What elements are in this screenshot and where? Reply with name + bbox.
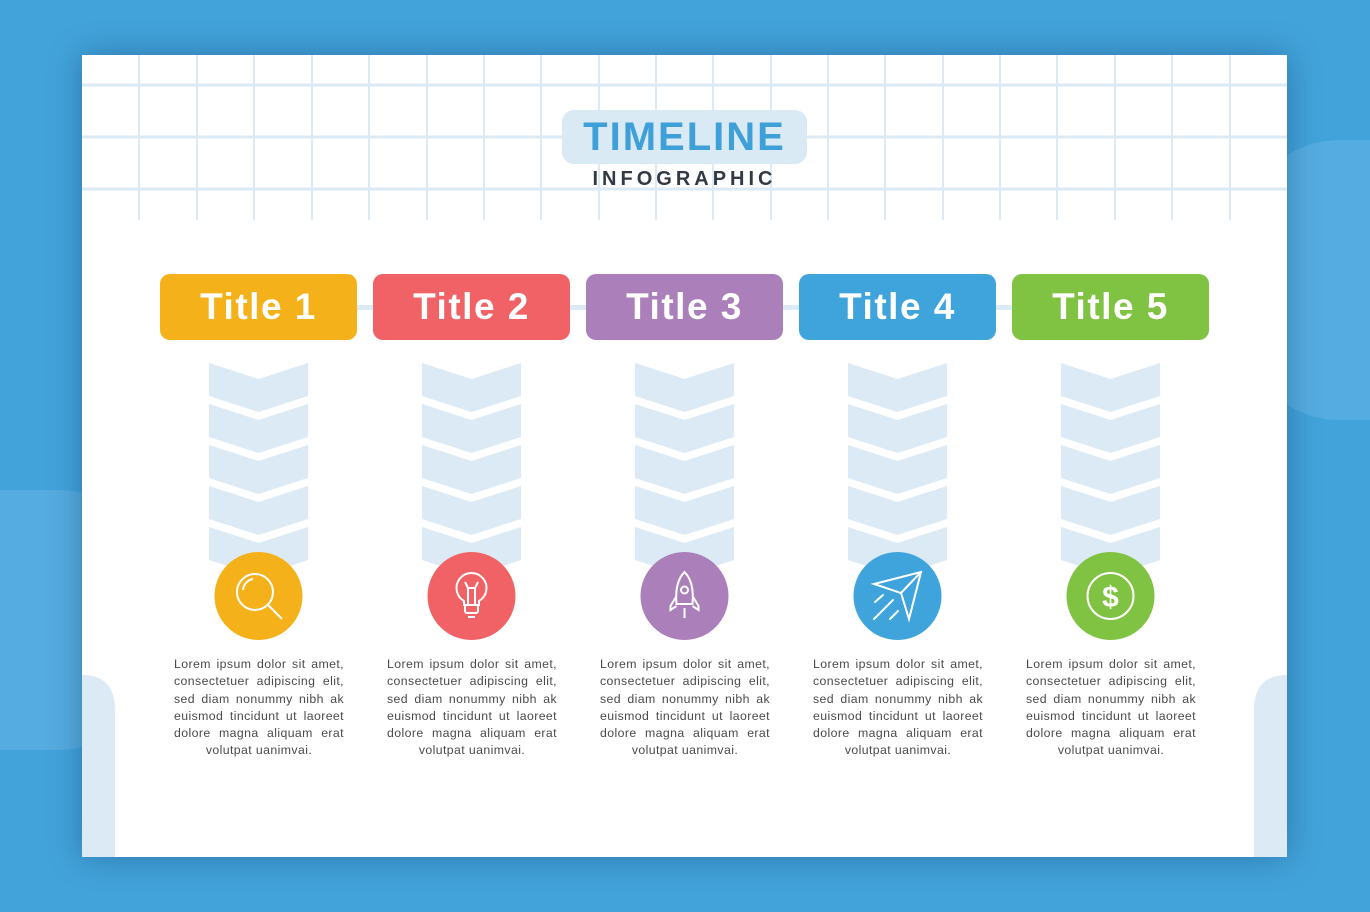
- icon: rocket: [640, 552, 728, 640]
- icon: dollar: [1066, 552, 1154, 640]
- card: [82, 55, 1287, 857]
- text: Lorem ipsum dolor sit amet, consectetuer adipiscing elit, sed diam nonummy nibh ak euismod tincidunt ut laoreet dolore magna aliquam erat volutpat uanimvai.: [813, 657, 983, 757]
- text blocks: Lorem ipsum dolor sit amet, consectetuer adipiscing elit, sed diam nonummy nibh ak euismod tincidunt ut laoreet dolore magna aliquam erat volutpat uanimvai.: [174, 657, 344, 757]
- connector line: [357, 305, 1012, 310]
- icon: search: [214, 552, 302, 640]
- title: TIMELINE: [583, 115, 786, 159]
- text: Lorem ipsum dolor sit amet, consectetuer adipiscing elit, sed diam nonummy nibh ak euismod tincidunt ut laoreet dolore magna aliquam erat volutpat uanimvai.: [600, 657, 770, 757]
- background blobs: [1240, 140, 1370, 420]
- icon: dollar: $: [1102, 581, 1119, 614]
- title: INFOGRAPHIC: [592, 168, 776, 190]
- text: Title 4: [839, 286, 956, 327]
- icon: paper plane: [854, 552, 942, 640]
- text: Lorem ipsum dolor sit amet, consectetuer adipiscing elit, sed diam nonummy nibh ak euismod tincidunt ut laoreet dolore magna aliquam erat volutpat uanimvai.: [387, 657, 557, 757]
- title boxes: Title 1: [200, 286, 317, 327]
- title: [562, 110, 807, 190]
- text: Title 3: [626, 286, 743, 327]
- text: Title 5: [1052, 286, 1169, 327]
- text: Lorem ipsum dolor sit amet, consectetuer adipiscing elit, sed diam nonummy nibh ak euismod tincidunt ut laoreet dolore magna aliquam erat volutpat uanimvai.: [1026, 657, 1196, 757]
- text: Title 2: [413, 286, 530, 327]
- title boxes: [160, 274, 357, 340]
- icon: bulb: [428, 552, 516, 640]
